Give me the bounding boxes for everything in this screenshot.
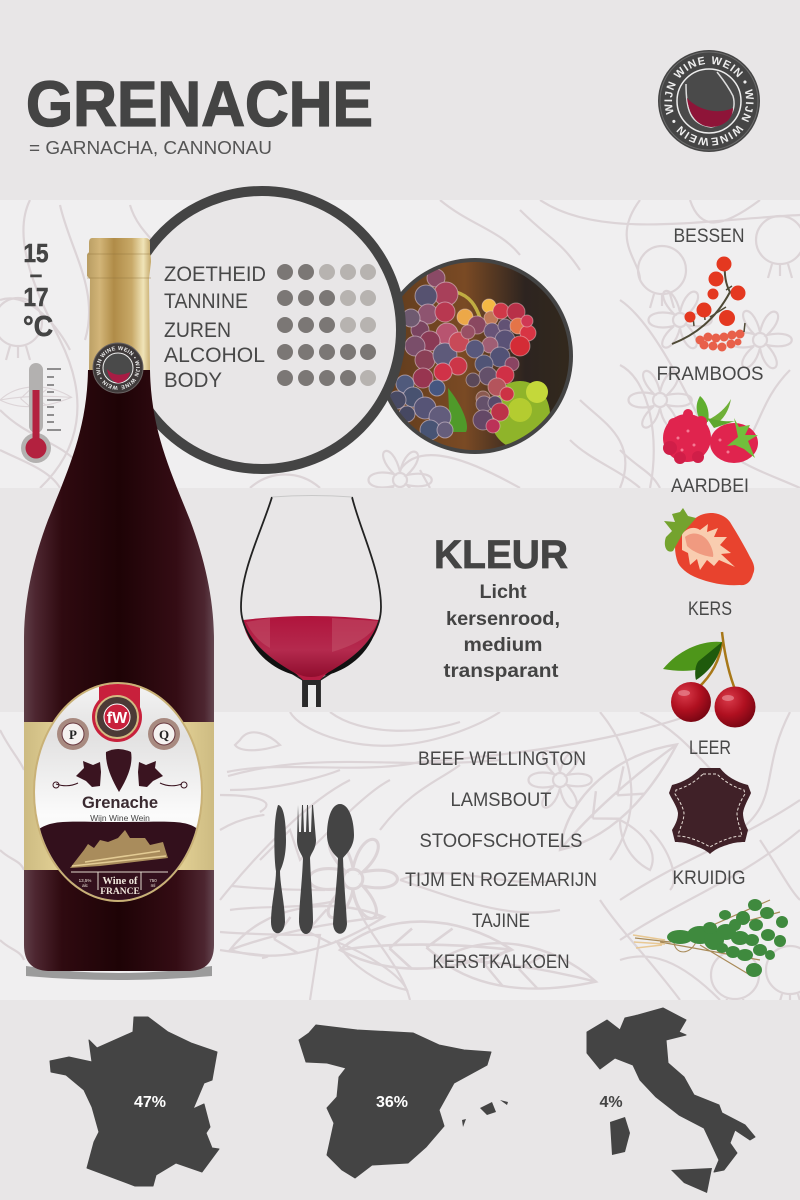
food pairing list: LAMSBOUT — [450, 790, 552, 811]
icon: thyme — [633, 899, 788, 977]
map: France — [50, 1017, 219, 1186]
map: France: 47% — [134, 1094, 166, 1111]
icon: wine glass — [241, 496, 381, 707]
serving temperature — [23, 238, 53, 343]
food pairing list: STOOFSCHOTELS — [420, 831, 582, 852]
food pairing list — [405, 749, 597, 973]
food pairing list: BEEF WELLINGTON — [418, 749, 586, 770]
heading: kleur — [434, 533, 568, 682]
icon: cherries — [663, 632, 756, 728]
serving temperature: 15 — [24, 238, 48, 268]
serving temperature: 17 — [24, 282, 48, 312]
icon: strawberry — [664, 508, 754, 585]
icon: thermometer — [21, 363, 61, 463]
aroma labels: AARDBEI — [671, 476, 749, 497]
label subtitle: Wijn Wine Wein — [90, 813, 150, 823]
label medal P: P — [69, 727, 77, 742]
heading: kleur: KLEUR — [434, 533, 568, 577]
taste labels: ZOETHEID — [164, 263, 266, 286]
lower — [226, 718, 681, 773]
label medal Q: Q — [159, 727, 169, 742]
label medal Q — [148, 718, 180, 750]
aroma labels: KRUIDIG — [672, 868, 746, 889]
icon: raspberries — [663, 396, 758, 464]
label emblem — [92, 692, 142, 742]
icon: red berries — [672, 256, 746, 352]
panel: taste profile circle — [123, 191, 401, 469]
colour description: kersenrood, — [446, 609, 560, 630]
map: Spain — [299, 1025, 508, 1178]
map: Italy: 4% — [599, 1094, 623, 1111]
label origin: ml — [151, 883, 155, 888]
photo: grapes — [375, 256, 575, 456]
icon: leather — [669, 768, 751, 854]
food pairing list: TIJM EN ROZEMARIJN — [405, 870, 597, 891]
label medal P — [57, 718, 89, 750]
bottle label band — [24, 722, 214, 870]
food pairing list: KERSTKALKOEN — [432, 952, 570, 973]
taste labels: BODY — [164, 369, 222, 392]
taste labels — [164, 263, 266, 392]
label origin: alc — [82, 883, 89, 888]
bottle — [24, 238, 214, 980]
aroma labels: FRAMBOOS — [656, 364, 764, 385]
food pairing list: TAJINE — [472, 911, 530, 932]
bottle neck logo: WEIN • WIJN WINE WEIN • WIJN WINE — [96, 346, 140, 390]
aroma labels — [656, 226, 764, 889]
colour description: medium — [464, 635, 542, 656]
subtitle: = GARNACHA, CANNONAU — [29, 137, 272, 158]
serving temperature: °C — [23, 311, 53, 343]
label origin: FRANCE — [100, 887, 140, 897]
aroma labels: BESSEN — [674, 226, 744, 247]
taste labels: ALCOHOL — [164, 344, 265, 367]
serving temperature: – — [30, 262, 42, 287]
rating dots — [277, 264, 376, 386]
bottle label — [30, 680, 210, 905]
map: Spain: 36% — [376, 1094, 408, 1111]
label grape motif — [53, 749, 187, 792]
aroma labels: LEER — [689, 738, 731, 759]
map: Italy — [587, 1008, 755, 1193]
label origin: 13,5% — [79, 878, 91, 883]
title: GRENACHE — [26, 68, 373, 140]
colour description — [444, 582, 560, 682]
taste labels: ZUREN — [164, 319, 231, 342]
label origin: 750 — [149, 878, 157, 883]
aroma labels: KERS — [688, 599, 732, 620]
colour description: Licht — [480, 582, 527, 603]
taste labels: TANNINE — [164, 290, 248, 313]
label ribbon — [99, 684, 140, 707]
logo: WEIN • WIJN WINE WEIN • WIJN WINE — [664, 56, 754, 146]
label emblem: fW — [107, 710, 128, 727]
patterned band: upper and lower — [0, 200, 800, 1018]
label vineyard — [70, 830, 168, 868]
bottle capsule — [87, 238, 151, 370]
label wine name: Grenache — [82, 794, 158, 812]
icon: cutlery — [271, 804, 354, 934]
colour description: transparant — [444, 661, 559, 682]
label origin: Wine of — [102, 876, 138, 887]
label origin — [71, 872, 168, 897]
